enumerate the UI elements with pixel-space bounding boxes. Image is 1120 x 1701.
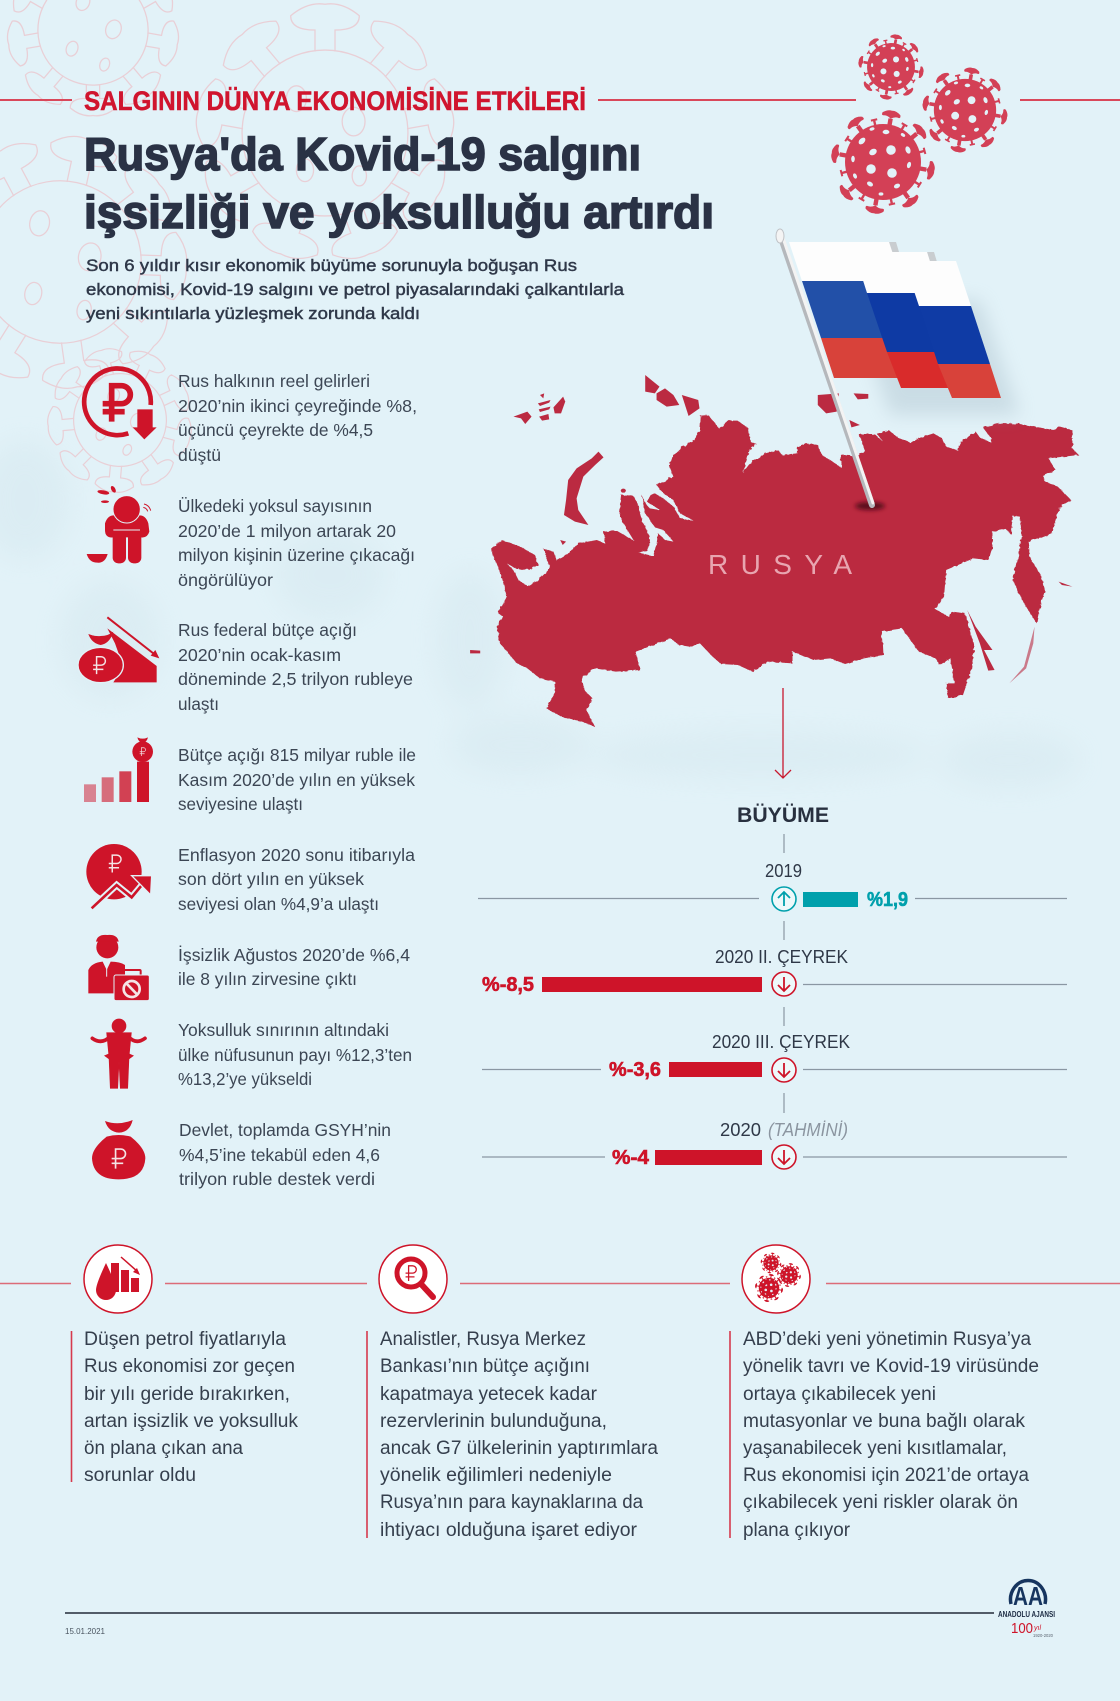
section heading: SALGININ DÜNYA EKONOMİSİNE ETKİLERİ (84, 86, 586, 116)
row: 2020 Q2 (482, 946, 849, 996)
list item 3: federal budget deficit (78, 617, 413, 714)
row: 2020 Q2: %-8,5 (482, 974, 534, 996)
list item 1: real incomes: üçüncü çeyrekte de %4,5 (178, 420, 373, 440)
arrow: map to growth chart (775, 688, 791, 778)
panel: oil prices: sorunlar oldu (84, 1465, 196, 1486)
list item 7: poverty line: Yoksulluk sınırının altındaki (178, 1020, 389, 1040)
panel: analysts: yönelik eğilimleri nedeniyle (380, 1465, 612, 1486)
list item 5: inflation: seviyesi olan %4,9’a ulaştı (178, 894, 379, 914)
list item 3: federal budget deficit: döneminde 2,5 trilyon rubleye (178, 669, 413, 689)
list item 5: inflation: Enflasyon 2020 sonu itibarıyla (178, 845, 415, 865)
title: Rusya'da Kovid-19 salgını (84, 128, 641, 180)
panel: analysts: ancak G7 ülkelerinin yaptırımlara (380, 1438, 658, 1459)
icon: viruses (742, 1245, 810, 1313)
panel: new risks (730, 1245, 1039, 1541)
panel: analysts: Rusya’nın para kaynaklarına da (380, 1492, 643, 1513)
panel: new risks: Rus ekonomisi için 2021’de ortaya (743, 1465, 1029, 1486)
row: 2020 Q3: %-3,6 (609, 1059, 661, 1081)
panel: new risks: çıkabilecek yeni riskler olarak ön (743, 1492, 1018, 1513)
list item 2: poor population: 2020’de 1 milyon artarak 20 (178, 521, 396, 541)
row: 2020 estimate: %-4 (612, 1147, 650, 1169)
map label: RUSYA: RUSYA (708, 549, 852, 580)
list item 2: poor population: milyon kişinin üzerine çıkacağı (178, 545, 415, 565)
list item 4: monthly deficit: Bütçe açığı 815 milyar ruble ile (178, 745, 416, 765)
chart: growth (478, 804, 1067, 1169)
logo: Anadolu Ajansı: ANADOLU AJANSI (998, 1610, 1055, 1619)
list item 7: poverty line: %13,2’ye yükseldi (178, 1069, 312, 1089)
row: 2020 estimate (612, 1119, 848, 1169)
panel: new risks: mutasyonlar ve buna bağlı olarak (743, 1411, 1026, 1432)
logo: Anadolu Ajansı: yıl (1033, 1625, 1041, 1632)
chart heading: BÜYÜME (737, 804, 829, 827)
panel: oil prices: artan işsizlik ve yoksulluk (84, 1411, 298, 1432)
panel: oil prices (72, 1245, 298, 1486)
logo: Anadolu Ajansı: 1920-2020 (1033, 1633, 1053, 1638)
list item 8: state support: %4,5’ine tekabül eden 4,6 (179, 1145, 380, 1165)
icon: three viruses (830, 34, 1008, 215)
logo: Anadolu Ajansı: 100 (1011, 1620, 1033, 1637)
list item 3: federal budget deficit: ulaştı (178, 694, 219, 714)
date: 15.01.2021 (65, 1626, 105, 1636)
row: 2019: %1,9 (867, 889, 908, 911)
icon: man with briefcase (88, 935, 149, 1001)
header rule (0, 99, 1120, 101)
bottom rule (0, 1282, 1120, 1284)
intro text (86, 256, 625, 323)
panel: new risks: ABD’deki yeni yönetimin Rusya’ya (743, 1329, 1031, 1350)
list item 3: federal budget deficit: 2020’nin ocak-kasım (178, 645, 341, 665)
panel: analysts: kapatmaya yetecek kadar (380, 1384, 598, 1405)
list item 1: real incomes: düştü (178, 445, 221, 465)
list item 5: inflation (86, 844, 415, 914)
intro text: Son 6 yıldır kısır ekonomik büyüme sorunuyla boğuşan Rus (86, 256, 577, 275)
icon: oil drop and falling bars (84, 1245, 152, 1313)
list item 4: monthly deficit: seviyesine ulaştı (178, 794, 303, 814)
list item 2: poor population: öngörülüyor (178, 570, 273, 590)
list item 1: real incomes: 2020’nin ikinci çeyreğinde %8, (178, 396, 417, 416)
panel: analysts: Bankası’nın bütçe açığını (380, 1356, 590, 1377)
row: 2020 Q3: 2020 III. ÇEYREK (712, 1031, 851, 1052)
title (84, 128, 714, 238)
list item 6: unemployment: İşsizlik Ağustos 2020’de %6,4 (178, 945, 410, 965)
list item 6: unemployment (88, 935, 410, 1001)
list item 1: real incomes (84, 368, 417, 465)
list item 1: real incomes: Rus halkının reel gelirleri (178, 371, 370, 391)
flagpole (776, 229, 885, 510)
icon: money bag and falling slope (78, 617, 159, 683)
intro text: ekonomisi, Kovid-19 salgını ve petrol piyasalarındaki çalkantılarla (86, 280, 625, 299)
list item 2: poor population: Ülkedeki yoksul sayısının (178, 496, 372, 516)
list item 8: state support: Devlet, toplamda GSYH’nin (179, 1120, 391, 1140)
flag of Russia (789, 242, 1001, 398)
panel: new risks: yönelik tavrı ve Kovid-19 virüsünde (743, 1356, 1039, 1377)
logo: Anadolu Ajansı: AA (1013, 1581, 1043, 1611)
flag shadow (850, 300, 1020, 415)
list item 5: inflation: son dört yılın en yüksek (178, 869, 364, 889)
panel: analysts: rezervlerinin bulunduğuna, (380, 1411, 607, 1432)
panel: oil prices: bir yılı geride bırakırken, (84, 1384, 290, 1405)
list item 8: state support: trilyon ruble destek verdi (179, 1169, 375, 1189)
list item 2: poor population (87, 485, 415, 590)
icon: magnifier with ruble (379, 1245, 447, 1313)
list item 3: federal budget deficit: Rus federal bütçe açığı (178, 620, 357, 640)
panel: analysts (367, 1245, 658, 1541)
panel: analysts: Analistler, Rusya Merkez (380, 1329, 586, 1350)
icon: rising bars with money bag (84, 737, 153, 802)
row: 2020 estimate: 2020 (720, 1119, 761, 1140)
panel: new risks: ortaya çıkabilecek yeni (743, 1384, 936, 1405)
map: Russia (470, 375, 1079, 727)
row: 2020 estimate: (TAHMİNİ) (768, 1119, 848, 1140)
background virus outlines (0, 0, 458, 519)
icon: person with empty pockets (92, 1019, 145, 1088)
row: 2019 (765, 860, 908, 911)
panel: new risks: yaşanabilecek yeni kısıtlamalar, (743, 1438, 1007, 1459)
logo: Anadolu Ajansı (998, 1580, 1055, 1638)
list item 6: unemployment: ile 8 yılın zirvesine çıktı (178, 969, 357, 989)
icon: ruble falling (84, 368, 157, 439)
footer rule (65, 1612, 994, 1614)
panel: new risks: plana çıkıyor (743, 1520, 851, 1541)
panel: oil prices: Düşen petrol fiyatlarıyla (84, 1329, 286, 1350)
row: 2019: 2019 (765, 860, 802, 881)
panel: oil prices: ön plana çıkan ana (84, 1438, 243, 1459)
row: 2020 Q2: 2020 II. ÇEYREK (715, 946, 849, 967)
list item 4: monthly deficit (84, 737, 416, 814)
icon: ruble money bag (92, 1120, 145, 1179)
title: işsizliği ve yoksulluğu artırdı (84, 186, 714, 238)
list item 8: state support (92, 1120, 391, 1189)
panel: analysts: ihtiyacı olduğuna işaret ediyor (380, 1520, 638, 1541)
intro text: yeni sıkıntılarla yüzleşmek zorunda kaldı (86, 304, 420, 323)
list item 4: monthly deficit: Kasım 2020’de yılın en yüksek (178, 770, 415, 790)
row: 2020 Q3 (609, 1031, 851, 1082)
icon: ruble coin with rising arrow (86, 844, 152, 908)
list item 7: poverty line (92, 1019, 412, 1089)
list item 7: poverty line: ülke nüfusunun payı %12,3’ten (178, 1045, 412, 1065)
icon: hunched person with bowl (87, 485, 151, 563)
panel: oil prices: Rus ekonomisi zor geçen (84, 1356, 295, 1377)
